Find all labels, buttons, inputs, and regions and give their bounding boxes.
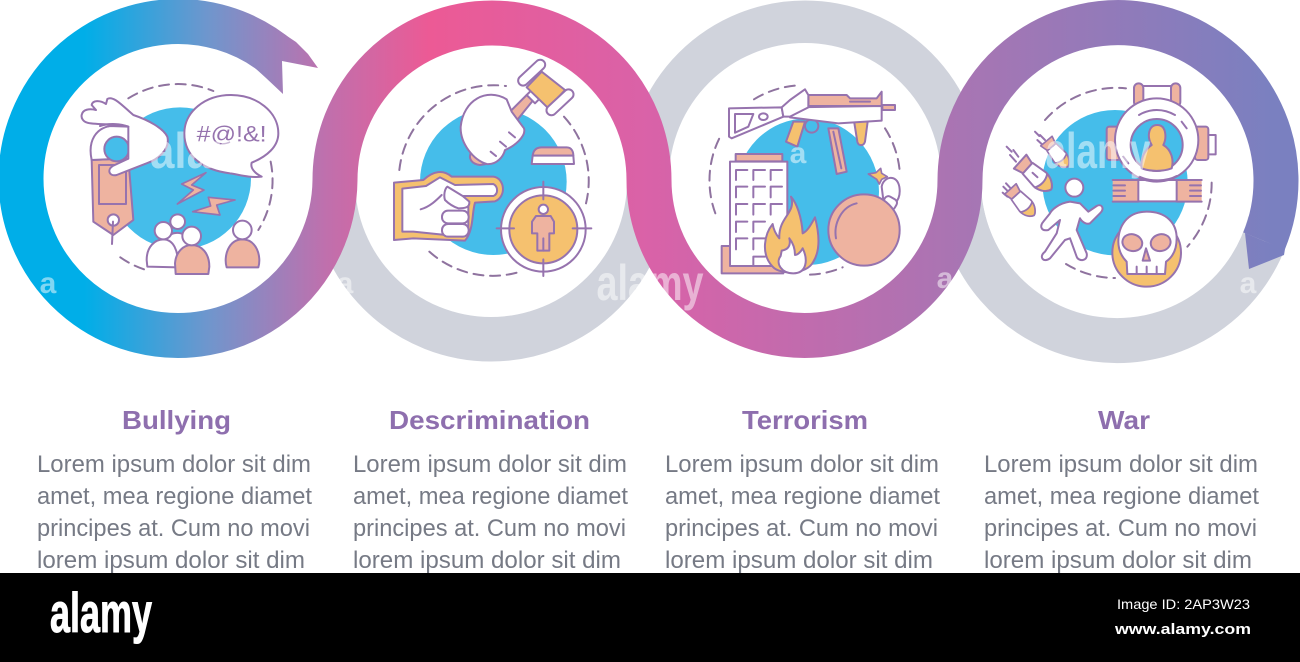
body text: Terrorism: principes at. Cum no movi (665, 515, 938, 542)
grey ring segments (333, 23, 1270, 341)
body text: War (984, 451, 1259, 574)
watermark: semi-transparent alamy marks: a (1240, 267, 1257, 300)
body text: War: Lorem ipsum dolor sit dim (984, 451, 1258, 478)
watermark: semi-transparent alamy marks: alam (150, 123, 250, 179)
heading: War: War (1098, 405, 1150, 435)
body text: War: principes at. Cum no movi (984, 515, 1257, 542)
body text: Descrimination: Lorem ipsum dolor sit dim (353, 451, 627, 478)
watermark: semi-transparent alamy marks: a (790, 137, 807, 170)
column: Terrorism (665, 405, 940, 574)
column: Descrimination (353, 405, 628, 574)
body text: Bullying: amet, mea regione diamet (37, 483, 312, 510)
body text: Descrimination: amet, mea regione diamet (353, 483, 628, 510)
image id: Image ID: 2AP3W23 (1117, 596, 1250, 612)
watermark: semi-transparent alamy marks: a (40, 267, 57, 300)
footer bar (0, 573, 1300, 662)
body text: Terrorism: Lorem ipsum dolor sit dim (665, 451, 939, 478)
icon: bullying artwork (82, 84, 278, 274)
icon: war artwork (1003, 83, 1216, 287)
body text: Descrimination (353, 451, 628, 574)
alamy logo: alamy (50, 581, 152, 644)
body text: War: amet, mea regione diamet (984, 483, 1259, 510)
body text: Terrorism (665, 451, 940, 574)
website: www.alamy.com (1114, 621, 1251, 638)
watermark: semi-transparent alamy marks: alamy (1046, 123, 1151, 179)
icon: terrorism artwork (709, 85, 900, 275)
watermark: semi-transparent alamy marks (40, 123, 1257, 311)
column: Bullying (37, 405, 312, 574)
watermark: semi-transparent alamy marks: alamy (596, 255, 704, 311)
body text: Descrimination: principes at. Cum no movi (353, 515, 626, 542)
gradient ribbon (21, 21, 1285, 336)
body text: Bullying: Lorem ipsum dolor sit dim (37, 451, 311, 478)
body text: Terrorism: lorem ipsum dolor sit dim (665, 547, 933, 574)
heading: Terrorism: Terrorism (742, 405, 868, 435)
body text: Bullying: lorem ipsum dolor sit dim (37, 547, 305, 574)
icon: discrimination artwork (394, 58, 591, 276)
body text: Bullying (37, 451, 312, 574)
watermark: semi-transparent alamy marks: a (937, 262, 954, 295)
body text: Descrimination: lorem ipsum dolor sit dim (353, 547, 621, 574)
icon: bullying artwork: #@!&! (197, 122, 267, 147)
white inner discs (43, 43, 1253, 317)
heading: Bullying: Bullying (122, 405, 231, 435)
heading: Descrimination: Descrimination (389, 405, 590, 435)
column: War (984, 405, 1259, 574)
body text: War: lorem ipsum dolor sit dim (984, 547, 1252, 574)
body text: Terrorism: amet, mea regione diamet (665, 483, 940, 510)
watermark: semi-transparent alamy marks: a (337, 267, 354, 300)
body text: Bullying: principes at. Cum no movi (37, 515, 310, 542)
